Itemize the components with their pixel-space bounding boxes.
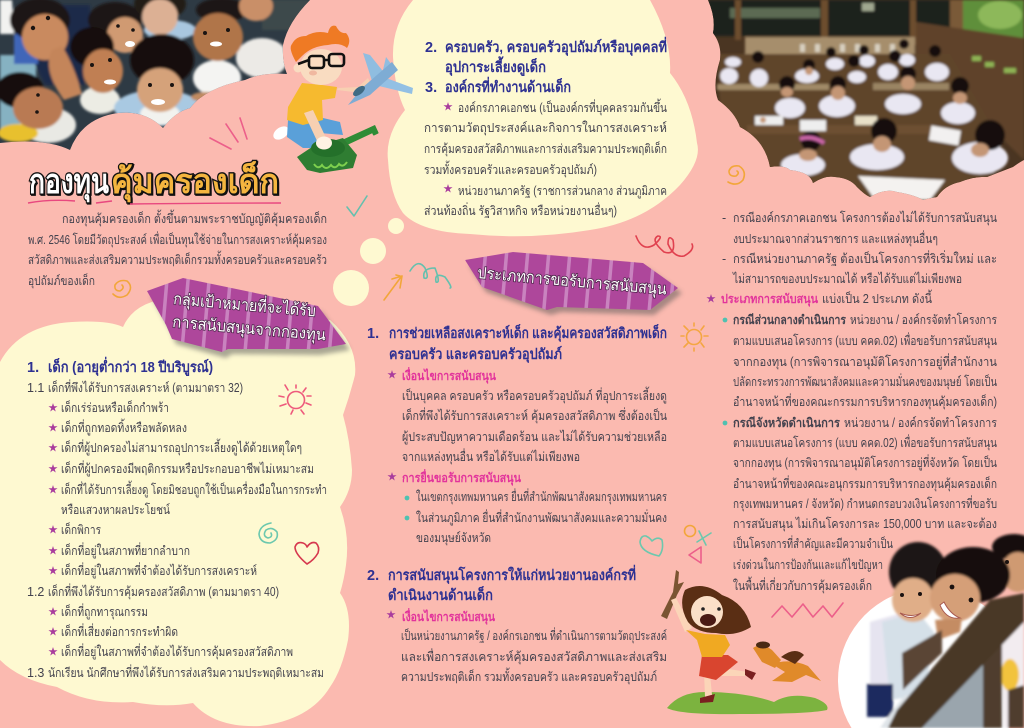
text block: right column conditions and support categories: จากกองทุน (การพิจารณาอนุมัติโครงการอยู่ที่สำนักงาน bbox=[733, 353, 997, 370]
text block: support type 2: การสนับสนุนโครงการให้แก่หน่วยงานองค์กรที่ bbox=[388, 564, 636, 584]
doodles: pink burst lines bbox=[210, 118, 247, 149]
text block: support type 2: และเพื่อการสงเคราะห์คุ้มครองสวัสดิภาพและส่งเสริม bbox=[401, 648, 667, 665]
doodle: teal check bbox=[347, 196, 367, 216]
text block: target group 1 children: เด็กพิการ bbox=[61, 522, 101, 537]
cheeks and mouth bbox=[309, 70, 317, 76]
text block: introduction: กองทุนคุ้มครองเด็ก ตั้งขึ้นตามพระราชบัญญัติคุ้มครองเด็ก bbox=[62, 209, 327, 227]
text block: target groups 2 and 3: องค์กรภาคเอกชน (เป็นองค์กรที่บุคคลรวมกันขึ้น bbox=[458, 98, 667, 116]
mouth bbox=[700, 614, 716, 626]
text block: right column conditions and support categories: - bbox=[722, 211, 726, 225]
ribbon: target groups: การสนับสนุนจากกองทุน bbox=[172, 314, 327, 345]
doodle: orange arrow bbox=[384, 275, 402, 300]
text block: right column conditions and support categories: เป็นโครงการที่สำคัญและมีความจำเป็น bbox=[733, 535, 893, 551]
head bbox=[300, 49, 342, 85]
text block: target group 1 children: เด็กที่พึงได้รับการสงเคราะห์ (ตามมาตรา 32) bbox=[48, 379, 243, 395]
doodle: green cross bbox=[697, 531, 711, 545]
text block: target groups 2 and 3: 2. bbox=[425, 40, 437, 56]
text block: support type 1: ผู้ประสบปัญหาความเดือดร้อน และไม่ได้รับความช่วยเหลือ bbox=[402, 430, 667, 445]
dog bbox=[753, 642, 821, 682]
doodle: orange sun bbox=[681, 323, 708, 351]
title bbox=[28, 160, 281, 204]
text block: target groups 2 and 3: การคุ้มครองสวัสดิภาพและการส่งเสริมความประพฤติเด็ก bbox=[424, 141, 667, 157]
text block: target group 1 children: หรือแสวงหาผลประโยชน์ bbox=[61, 502, 170, 517]
plane bbox=[348, 53, 413, 105]
grass bbox=[667, 692, 828, 714]
text block: right column conditions and support categories: ★ bbox=[706, 294, 716, 305]
hair bbox=[682, 586, 751, 634]
doodle: pink triangle bbox=[689, 547, 701, 563]
text block: support type 1: ★ bbox=[387, 370, 397, 381]
text block: support type 1: ของมนุษย์จังหวัด bbox=[416, 531, 491, 546]
text block: introduction bbox=[28, 209, 327, 289]
text block: target groups 2 and 3: 3. bbox=[425, 80, 437, 96]
text block: target group 1 children: เด็กที่อยู่ในสภาพที่จำต้องได้รับการสงเคราะห์ bbox=[61, 562, 257, 579]
text block: target groups 2 and 3: ★ bbox=[443, 102, 453, 113]
doodle: pink zigzag bbox=[772, 603, 843, 617]
ear bbox=[294, 64, 302, 72]
hand on tank bbox=[316, 136, 332, 150]
text block: target group 1 children: เด็กเร่ร่อนหรือเด็กกำพร้า bbox=[61, 400, 169, 415]
text block: support type 2: เงื่อนไขการสนับสนุน bbox=[402, 608, 495, 625]
text block: target group 1 children: ★ bbox=[48, 546, 58, 557]
text block: target groups 2 and 3: องค์กรที่ทำงานด้านเด็ก bbox=[445, 76, 571, 96]
text block: right column conditions and support categories bbox=[706, 210, 997, 594]
text block: support type 1: เงื่อนไขการสนับสนุน bbox=[402, 367, 496, 384]
text block: target group 1 children: ★ bbox=[48, 485, 58, 496]
text block: support type 2: ★ bbox=[386, 610, 396, 621]
legs bbox=[704, 668, 748, 697]
photo: classroom top right bbox=[700, 0, 1024, 200]
text block: support type 2: ความประพฤติเด็ก รวมทั้งครอบครัว และครอบครัวอุปถัมภ์ bbox=[401, 667, 657, 685]
hair bbox=[291, 26, 349, 62]
text block: target groups 2 and 3: ★ bbox=[443, 184, 453, 195]
text block: target group 1 children: ★ bbox=[48, 627, 58, 638]
text block: target group 1 children: ★ bbox=[48, 443, 58, 454]
text block: target groups 2 and 3: รวมทั้งครอบครัวและครอบครัวอุปถัมภ์) bbox=[424, 160, 597, 178]
text block: support type 1: ในเขตกรุงเทพมหานคร ยื่นที่สำนักพัฒนาสังคมกรุงเทพมหานคร bbox=[416, 488, 667, 505]
glasses bbox=[298, 54, 344, 68]
doodle: pink sun bbox=[279, 385, 311, 414]
text block: target group 1 children: เด็กที่เสี่ยงต่อการกระทำผิด bbox=[61, 623, 178, 639]
skirt bbox=[699, 655, 738, 680]
text block: target groups 2 and 3: หน่วยงานภาครัฐ (ราชการส่วนกลาง ส่วนภูมิภาค bbox=[458, 184, 667, 199]
text block: target group 1 children: ★ bbox=[48, 423, 58, 434]
text block: target group 1 children: ★ bbox=[48, 525, 58, 536]
illustration: boy with plane and tank bbox=[271, 26, 413, 173]
text block: target groups 2 and 3 bbox=[424, 36, 667, 218]
text block: target group 1 children: เด็กที่ได้รับการเลี้ยงดู โดยมิชอบถูกใช้เป็นเครื่องมือในการกระทำ bbox=[61, 480, 327, 498]
text block: introduction: พ.ศ. 2546 โดยมีวัตถุประสงค์ เพื่อเป็นทุนใช้จ่ายในการสงเคราะห์คุ้มครอง bbox=[28, 231, 327, 248]
doodle: green swirl bbox=[259, 523, 277, 543]
text block: support type 1: จากแหล่งทุนอื่น หรือได้รับแต่ไม่เพียงพอ bbox=[402, 448, 580, 465]
text block: introduction: อุปถัมภ์ของเด็ก bbox=[28, 273, 95, 289]
text block: target group 1 children: 1.3 bbox=[27, 666, 44, 680]
text block: target group 1 children: 1.2 bbox=[27, 585, 44, 599]
text block: target group 1 children: เด็ก (อายุต่ำกว่า 18 ปีบริบูรณ์) bbox=[48, 356, 213, 376]
text block: target group 1 children: เด็กที่อยู่ในสภาพที่จำต้องได้รับการคุ้มครองสวัสดิภาพ bbox=[61, 643, 293, 660]
text block: target group 1 children: ★ bbox=[48, 607, 58, 618]
text block: support type 2: เป็นหน่วยงานภาครัฐ / องค์กรเอกชน ที่ดำเนินการตามวัตถุประสงค์ bbox=[401, 627, 667, 644]
shoe bbox=[271, 124, 291, 142]
text block: target group 1 children: เด็กที่ถูกทารุณกรรม bbox=[61, 603, 148, 620]
text block: right column conditions and support categories: หน่วยงาน / องค์กรจัดทำโครงการ bbox=[850, 312, 997, 327]
text block: support type 1: เด็กที่พึงได้รับการสงเคราะห์ คุ้มครองสวัสดิภาพ ซึ่งต้องเป็น bbox=[402, 407, 667, 424]
text block: target group 1 children: 1. bbox=[27, 360, 39, 376]
doodle: orange circle bbox=[684, 526, 696, 536]
text block: target group 1 children: เด็กที่ผู้ปกครองมีพฤติกรรมหรือประกอบอาชีพไม่เหมาะสม bbox=[61, 460, 314, 477]
panel: cream cloud left bbox=[0, 298, 355, 726]
text block: right column conditions and support categories: กรณีจังหวัดดำเนินการ bbox=[733, 416, 840, 430]
text block: support type 1: ในส่วนภูมิภาค ยื่นที่สำนักงานพัฒนาสังคมและความมั่นคง bbox=[416, 509, 667, 526]
text block: target group 1 children: 1.1 bbox=[27, 381, 44, 395]
doodle: orange swirl top right bbox=[728, 166, 744, 184]
pants bbox=[287, 118, 343, 148]
title: กองทุน bbox=[29, 163, 109, 203]
text block: right column conditions and support categories: หน่วยงาน / องค์กรจัดทำโครงการ bbox=[844, 415, 997, 430]
text block: target groups 2 and 3: ครอบครัว, ครอบครัวอุปถัมภ์หรือบุคคลที่ bbox=[445, 36, 667, 56]
photo: children group top left bbox=[0, 0, 320, 150]
text block: right column conditions and support categories: กรณีหน่วยงานภาครัฐ ต้องเป็นโครงการที่ริเริ่มใหม่ และ bbox=[733, 250, 997, 266]
text block: target groups 2 and 3: ส่วนท้องถิ่น รัฐวิสาหกิจ หรือหน่วยงานอื่นๆ) bbox=[424, 202, 617, 218]
text block: right column conditions and support categories: เร่งด่วนในการป้องกันและแก้ไขปัญหา bbox=[733, 558, 883, 572]
photo: smiling children bottom right bbox=[838, 534, 1024, 728]
doodle: teal loops bbox=[410, 264, 451, 288]
text block: right column conditions and support categories: ประเภทการสนับสนุน bbox=[721, 292, 818, 307]
shoes bbox=[700, 669, 756, 703]
text block: right column conditions and support categories: แบ่งเป็น 2 ประเภท ดังนี้ bbox=[822, 289, 932, 306]
text block: right column conditions and support categories: - bbox=[722, 252, 726, 266]
text block: target group 1 children: เด็กที่ผู้ปกครองไม่สามารถอุปการะเลี้ยงดูได้ด้วยเหตุใดๆ bbox=[61, 438, 302, 456]
text block: support type 2 bbox=[367, 564, 667, 685]
text block: target group 1 children: ★ bbox=[48, 566, 58, 577]
text block: target groups 2 and 3: อุปการะเลี้ยงดูเด็ก bbox=[445, 56, 546, 76]
text block: support type 1: ครอบครัว และครอบครัวอุปถัมภ์ bbox=[389, 345, 562, 363]
ribbon: target groups bbox=[147, 278, 350, 358]
arms bbox=[337, 78, 372, 93]
illustration: girl and dog on grass bbox=[661, 570, 828, 714]
text block: support type 1: การยื่นขอรับการสนับสนุน bbox=[402, 469, 521, 486]
text block: target group 1 children: ★ bbox=[48, 647, 58, 658]
ribbon: support types: ประเภทการขอรับการสนับสนุน bbox=[477, 265, 667, 300]
shirt bbox=[686, 630, 730, 657]
shirt bbox=[287, 83, 337, 125]
text block: support type 1 bbox=[367, 323, 667, 546]
text block: target group 1 children bbox=[27, 356, 327, 680]
text block: right column conditions and support categories: ไม่สามารถของบประมาณได้ หรือได้รับแต่ไม่เพียงพอ bbox=[732, 272, 962, 286]
text block: target group 1 children: ★ bbox=[48, 403, 58, 414]
ribbon: target groups: กลุ่มเป้าหมายที่จะได้รับ bbox=[173, 287, 317, 321]
ribbon: support types bbox=[465, 252, 682, 315]
text block: target group 1 children: นักเรียน นักศึกษาที่พึงได้รับการส่งเสริมความประพฤติเหมาะสม bbox=[48, 664, 324, 680]
text block: target groups 2 and 3: การตามวัตถุประสงค์และกิจการในการสงเคราะห์ bbox=[424, 121, 667, 136]
title: คุ้มครองเด็ก bbox=[111, 160, 279, 203]
doodle: teal heart bbox=[640, 536, 663, 556]
tank bbox=[297, 125, 379, 173]
doodle: red loops bbox=[636, 236, 693, 256]
text block: right column conditions and support categories: งบประมาณจากส่วนราชการ และแหล่งทุนอื่นๆ bbox=[733, 230, 938, 247]
text block: support type 2: ดำเนินงานด้านเด็ก bbox=[388, 585, 493, 604]
raised arm bbox=[671, 598, 692, 632]
stick bbox=[661, 570, 684, 619]
text block: target group 1 children: เด็กที่อยู่ในสภาพที่ยากลำบาก bbox=[61, 542, 190, 559]
text block: target group 1 children: เด็กที่พึงได้รับการคุ้มครองสวัสดิภาพ (ตามมาตรา 40) bbox=[48, 583, 279, 600]
text block: support type 1: การช่วยเหลือสงเคราะห์เด็ก และคุ้มครองสวัสดิภาพเด็ก bbox=[389, 323, 667, 342]
head bbox=[691, 596, 723, 628]
text block: support type 2: 2. bbox=[367, 568, 379, 584]
decorative cream bubbles bbox=[333, 218, 404, 306]
text block: support type 1: เป็นบุคคล ครอบครัว หรือครอบครัวอุปถัมภ์ ที่อุปการะเลี้ยงดู bbox=[402, 386, 667, 404]
text block: support type 1: ★ bbox=[387, 472, 397, 483]
doodle: red heart bbox=[295, 542, 319, 564]
text block: target group 1 children: เด็กที่ถูกทอดทิ้งหรือพลัดหลง bbox=[61, 418, 187, 436]
text block: introduction: สวัสดิภาพและส่งเสริมความประพฤติเด็กรวมทั้งครอบครัวและครอบครัว bbox=[28, 250, 327, 267]
text block: target group 1 children: ★ bbox=[48, 464, 58, 475]
panel: cream cloud top centre bbox=[388, 0, 698, 236]
doodle: orange swirl left bbox=[113, 280, 130, 297]
text block: right column conditions and support categories: กรณีส่วนกลางดำเนินการ bbox=[733, 313, 846, 327]
text block: right column conditions and support categories: ในพื้นที่เกี่ยวกับการคุ้มครองเด็ก bbox=[733, 576, 872, 594]
text block: support type 1: 1. bbox=[367, 326, 379, 342]
white circle backdrop bbox=[838, 588, 1022, 728]
